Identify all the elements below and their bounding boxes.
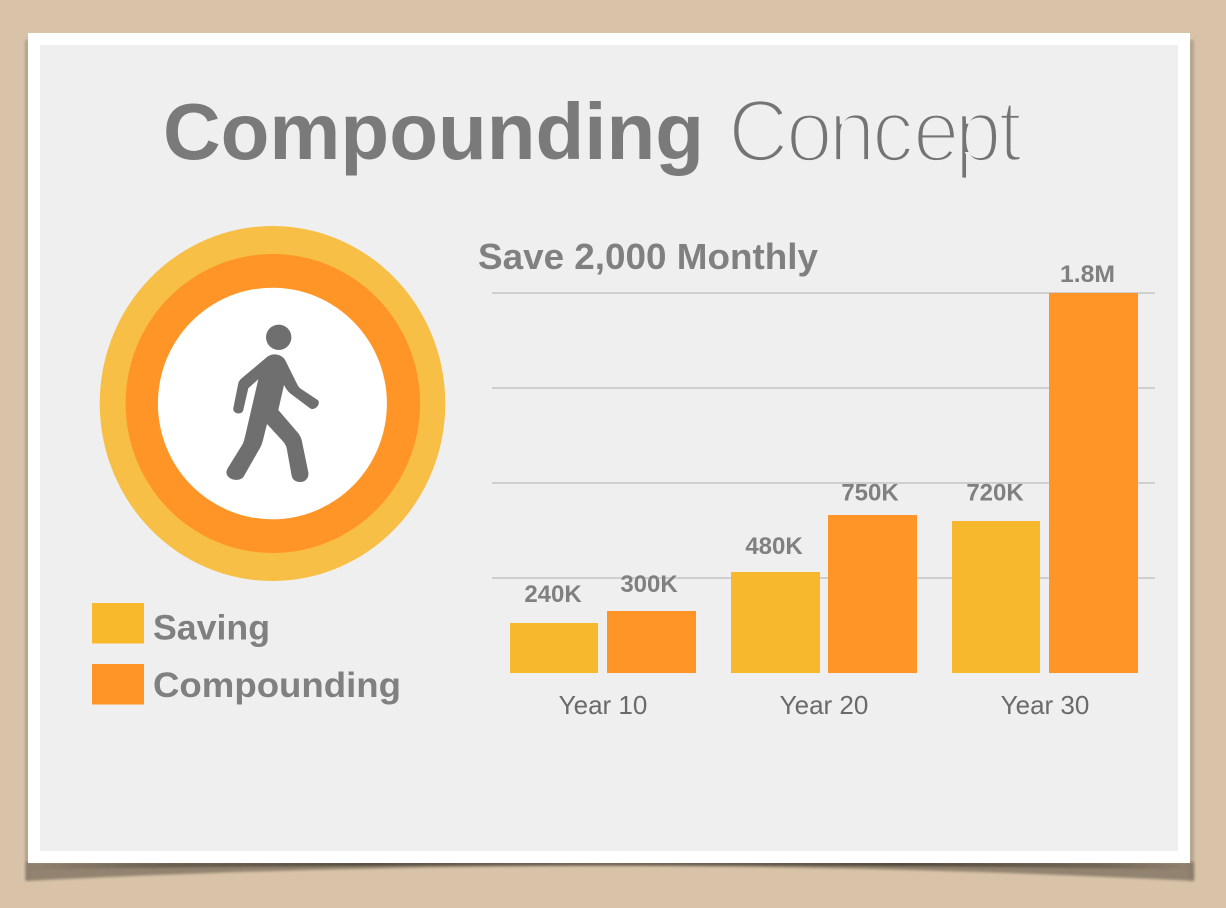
group: year 30: 1.8M: [1060, 261, 1115, 288]
group: year 30: [952, 261, 1138, 720]
group: year 10: [510, 571, 696, 720]
group: year 10: Year 10: [559, 690, 647, 720]
title: Compounding: [163, 87, 704, 176]
icon: walking person in rings: [100, 226, 445, 581]
bar chart: [492, 261, 1155, 720]
legend: compounding: Compounding: [153, 666, 401, 705]
group: year 20: [731, 480, 917, 720]
title: Concept: [728, 82, 1022, 180]
chart heading: Save 2,000 Monthly: [478, 236, 818, 277]
legend: [92, 603, 401, 705]
legend: saving: Saving: [153, 608, 270, 648]
title: [163, 82, 1022, 180]
group: year 20: 750K: [841, 480, 899, 506]
group: year 30: 720K: [966, 480, 1024, 506]
group: year 20: 480K: [745, 533, 803, 560]
group: year 10: 300K: [620, 571, 678, 598]
group: year 10: 240K: [524, 581, 582, 608]
group: year 20: Year 20: [780, 690, 868, 720]
group: year 30: Year 30: [1001, 690, 1089, 720]
legend: saving: [92, 603, 270, 648]
icon: walking figure: [226, 325, 319, 482]
